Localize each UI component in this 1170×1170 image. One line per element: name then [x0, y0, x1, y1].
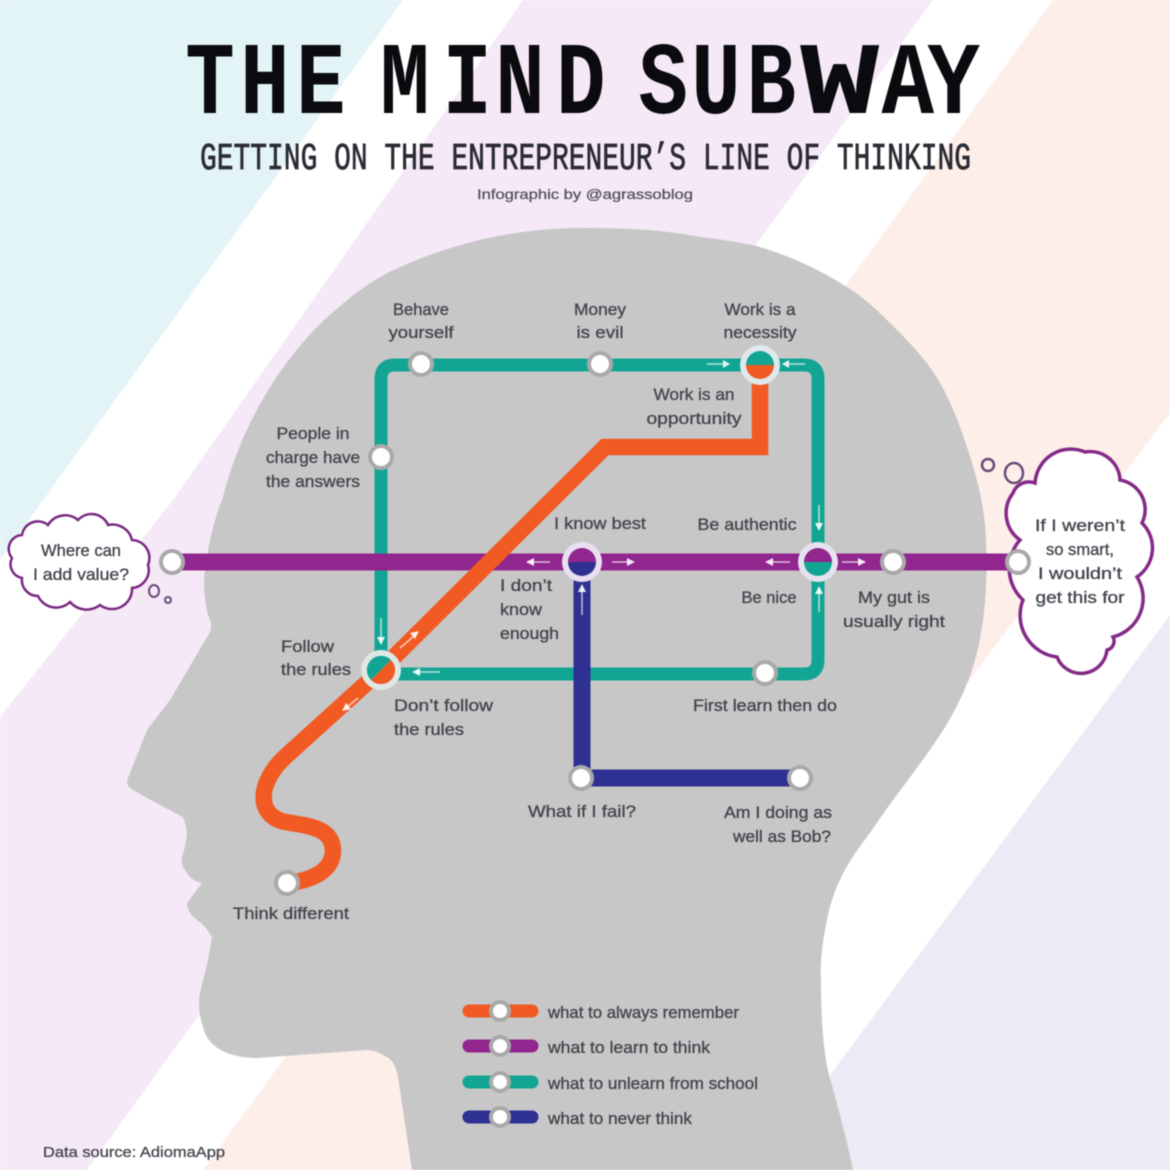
credit line: Infographic by @agrassoblog [477, 186, 693, 202]
head silhouette [127, 228, 987, 1170]
station: Behave yourself [410, 353, 432, 375]
label: Follow the rules [281, 637, 351, 679]
thought cloud: left: I add value? [33, 565, 129, 584]
thought cloud: right [982, 449, 1152, 673]
thought cloud: right: If I weren’t [1035, 516, 1125, 535]
label: I don't know enough [500, 576, 559, 643]
label: People in charge have the answers [266, 424, 360, 491]
legend row: learn to think: what to learn to think [547, 1038, 711, 1057]
label: Don't follow the rules: Don’t follow [394, 696, 494, 715]
label: Work is a necessity [724, 300, 797, 342]
label: First learn then do: First learn then do [693, 696, 837, 715]
title: W [800, 28, 879, 144]
label: My gut is usually right: My gut is [858, 588, 930, 607]
interchange: authentic [798, 542, 838, 582]
label: Work is a necessity: Work is a [724, 300, 796, 319]
legend [469, 1002, 758, 1128]
direction arrows [342, 360, 866, 711]
label: I don't know enough: know [500, 600, 543, 619]
thought cloud: left: Where can [41, 541, 121, 560]
label: Work is a necessity: necessity [724, 323, 797, 342]
label: Don't follow the rules [394, 696, 494, 739]
station: First learn then do [754, 662, 776, 684]
station: What if I fail [570, 767, 592, 789]
station labels [233, 300, 945, 923]
thought cloud: right: I wouldn’t [1038, 564, 1122, 583]
legend row: unlearn from school [469, 1073, 758, 1093]
label: Don't follow the rules: the rules [394, 720, 464, 739]
legend row: always remember: what to always remember [547, 1003, 739, 1022]
label: Money is evil: is evil [576, 323, 624, 342]
label: People in charge have the answers: the answers [266, 472, 360, 491]
thought cloud: right: so smart, [1046, 540, 1114, 559]
interchange: work [740, 345, 780, 385]
label: Am I doing as well as Bob: Am I doing as [724, 803, 832, 822]
label: Follow the rules: the rules [281, 660, 351, 679]
label: Follow the rules: Follow [281, 637, 335, 656]
label: Be nice: Be nice [742, 588, 796, 607]
station: My gut is usually right [882, 551, 904, 573]
label: Work is an opportunity: opportunity [646, 409, 742, 428]
dark blue line: what to never think [582, 562, 800, 778]
label: Work is an opportunity [646, 385, 742, 428]
label: Behave yourself [388, 300, 454, 342]
station: Am I doing as well as Bob [789, 767, 811, 789]
data source: Data source: AdiomaApp [43, 1144, 225, 1161]
label: I don't know enough: enough [500, 624, 559, 643]
label: Behave yourself: yourself [388, 323, 454, 342]
interchange: know [562, 542, 602, 582]
label: Be authentic: Be authentic [698, 515, 797, 534]
station: Money is evil [589, 353, 611, 375]
label: I don't know enough: I don’t [500, 576, 552, 595]
label: Work is an opportunity: Work is an [654, 385, 734, 404]
title: AY [882, 27, 981, 144]
station: People in charge [370, 446, 392, 468]
thought cloud: left [9, 514, 183, 610]
station: Think different [276, 872, 298, 894]
label: My gut is usually right [843, 588, 945, 631]
label: What if I fail: What if I fail? [528, 802, 636, 821]
legend row: unlearn from school: what to unlearn from school [547, 1074, 758, 1093]
legend row: learn to think [469, 1037, 711, 1057]
label: Think different: Think different [233, 904, 349, 923]
label: People in charge have the answers: charge have [266, 448, 360, 467]
interchange: rules [361, 650, 401, 690]
label: My gut is usually right: usually right [843, 612, 945, 631]
legend row: always remember [469, 1002, 739, 1022]
label: Money is evil [574, 300, 627, 342]
legend row: never think [469, 1108, 692, 1128]
label: Am I doing as well as Bob: well as Bob? [732, 827, 831, 846]
label: Money is evil: Money [574, 300, 627, 319]
teal line: what to unlearn from school [381, 365, 818, 674]
label: Am I doing as well as Bob [724, 803, 832, 846]
title: THE MIND SUB [185, 28, 796, 145]
subway map [172, 345, 1018, 894]
label: Behave yourself: Behave [393, 300, 449, 319]
purple line: what to learn to think [172, 554, 1018, 570]
label: People in charge have the answers: People in [276, 424, 350, 443]
thought cloud: right: get this for [1036, 588, 1125, 607]
legend row: never think: what to never think [547, 1109, 692, 1128]
orange line: what to always remember [264, 372, 760, 883]
label: I know best: I know best [554, 514, 646, 533]
